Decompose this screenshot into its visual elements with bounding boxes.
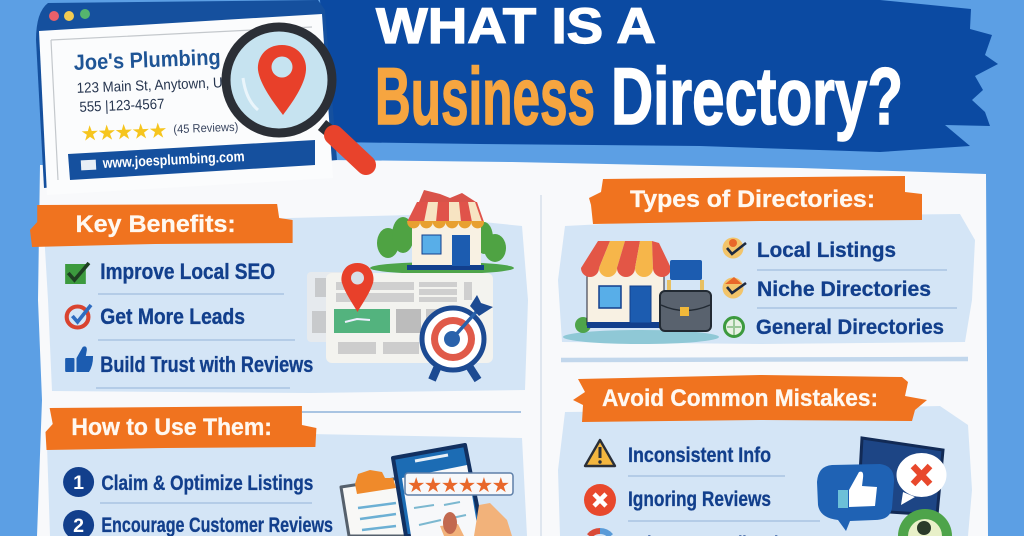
business listing card bbox=[36, 0, 337, 195]
item: general directories: General Directories bbox=[756, 316, 944, 339]
panel background bbox=[47, 434, 527, 536]
banner: key benefits bbox=[30, 204, 293, 247]
map bbox=[326, 273, 493, 363]
item: inconsistent info bbox=[585, 440, 771, 467]
paper background bbox=[37, 160, 988, 536]
item: improve local SEO: Improve Local SEO bbox=[100, 259, 275, 284]
item: get more leads: Get More Leads bbox=[100, 304, 245, 329]
item: inconsistent info: Inconsistent Info bbox=[628, 444, 771, 467]
location pin bbox=[258, 45, 306, 115]
banner: how to use: How to Use Them: bbox=[71, 414, 272, 441]
illustration: monitor and review bubbles bbox=[817, 438, 952, 536]
hand bbox=[474, 503, 512, 536]
x bubble bbox=[896, 453, 946, 497]
title: Business bbox=[375, 52, 595, 142]
hill bbox=[370, 262, 514, 274]
step 2 bbox=[63, 510, 333, 536]
illustration: store, map and target bbox=[307, 190, 514, 380]
map pin bbox=[341, 263, 374, 312]
step 1: 1 bbox=[73, 473, 84, 494]
banner: key benefits: Key Benefits: bbox=[75, 211, 236, 238]
thumbs-up bubble bbox=[817, 464, 894, 531]
step 1 bbox=[63, 467, 313, 497]
item: niche directories: Niche Directories bbox=[757, 278, 931, 301]
panel: key benefits bbox=[30, 190, 528, 393]
magnifying glass bbox=[226, 27, 366, 165]
window dots bbox=[49, 9, 90, 21]
monitor bbox=[858, 438, 943, 515]
panel: avoid common mistakes bbox=[558, 375, 972, 536]
phone bbox=[393, 445, 483, 536]
map ghost sheet bbox=[307, 272, 367, 342]
item: build trust with reviews: Build Trust with Reviews bbox=[100, 352, 313, 377]
item: build trust with reviews bbox=[65, 346, 313, 377]
panel background bbox=[558, 406, 972, 536]
browser frame bbox=[36, 0, 337, 188]
step 1: Claim & Optimize Listings bbox=[101, 471, 313, 495]
banner: how to use bbox=[45, 406, 316, 450]
rating pill bbox=[405, 473, 513, 495]
store bbox=[412, 222, 481, 266]
banner: avoid bbox=[573, 375, 927, 422]
website bar: www.joesplumbing.com bbox=[102, 149, 245, 172]
star rating: ★★★★★ bbox=[80, 118, 168, 146]
item: local listings: Local Listings bbox=[757, 239, 896, 262]
illustration: clipboard and phone bbox=[341, 445, 513, 536]
banner: avoid: Avoid Common Mistakes: bbox=[602, 385, 878, 412]
title bbox=[375, 0, 903, 142]
trees bbox=[377, 228, 399, 258]
panel: how to use them bbox=[45, 406, 527, 536]
card paper bbox=[39, 14, 333, 195]
phone: 555 |123-4567 bbox=[79, 97, 165, 116]
banner: types: Types of Directories: bbox=[630, 186, 875, 213]
target bbox=[432, 366, 478, 380]
panel: types of directories bbox=[558, 176, 975, 344]
title: Directory? bbox=[611, 52, 903, 142]
item: ignoring reviews: Ignoring Reviews bbox=[628, 488, 771, 511]
clipboard bbox=[341, 478, 410, 536]
title brush banner bbox=[320, 0, 998, 152]
illustration: clipboard and phone: ★★★★★★ bbox=[407, 473, 510, 497]
review count: (45 Reviews) bbox=[173, 120, 239, 136]
panel background bbox=[44, 215, 528, 393]
briefcase bbox=[670, 260, 702, 280]
website bar bbox=[68, 140, 315, 180]
banner: types bbox=[589, 176, 922, 224]
address: 123 Main St, Anytown, U bbox=[76, 75, 223, 97]
panel background bbox=[558, 214, 975, 344]
illustration: store and briefcase bbox=[563, 241, 719, 344]
item: ignoring reviews bbox=[584, 484, 771, 516]
item: using low-quality sites bbox=[589, 531, 800, 536]
business name: Joe's Plumbing bbox=[73, 44, 221, 75]
profile circle bbox=[898, 509, 952, 536]
